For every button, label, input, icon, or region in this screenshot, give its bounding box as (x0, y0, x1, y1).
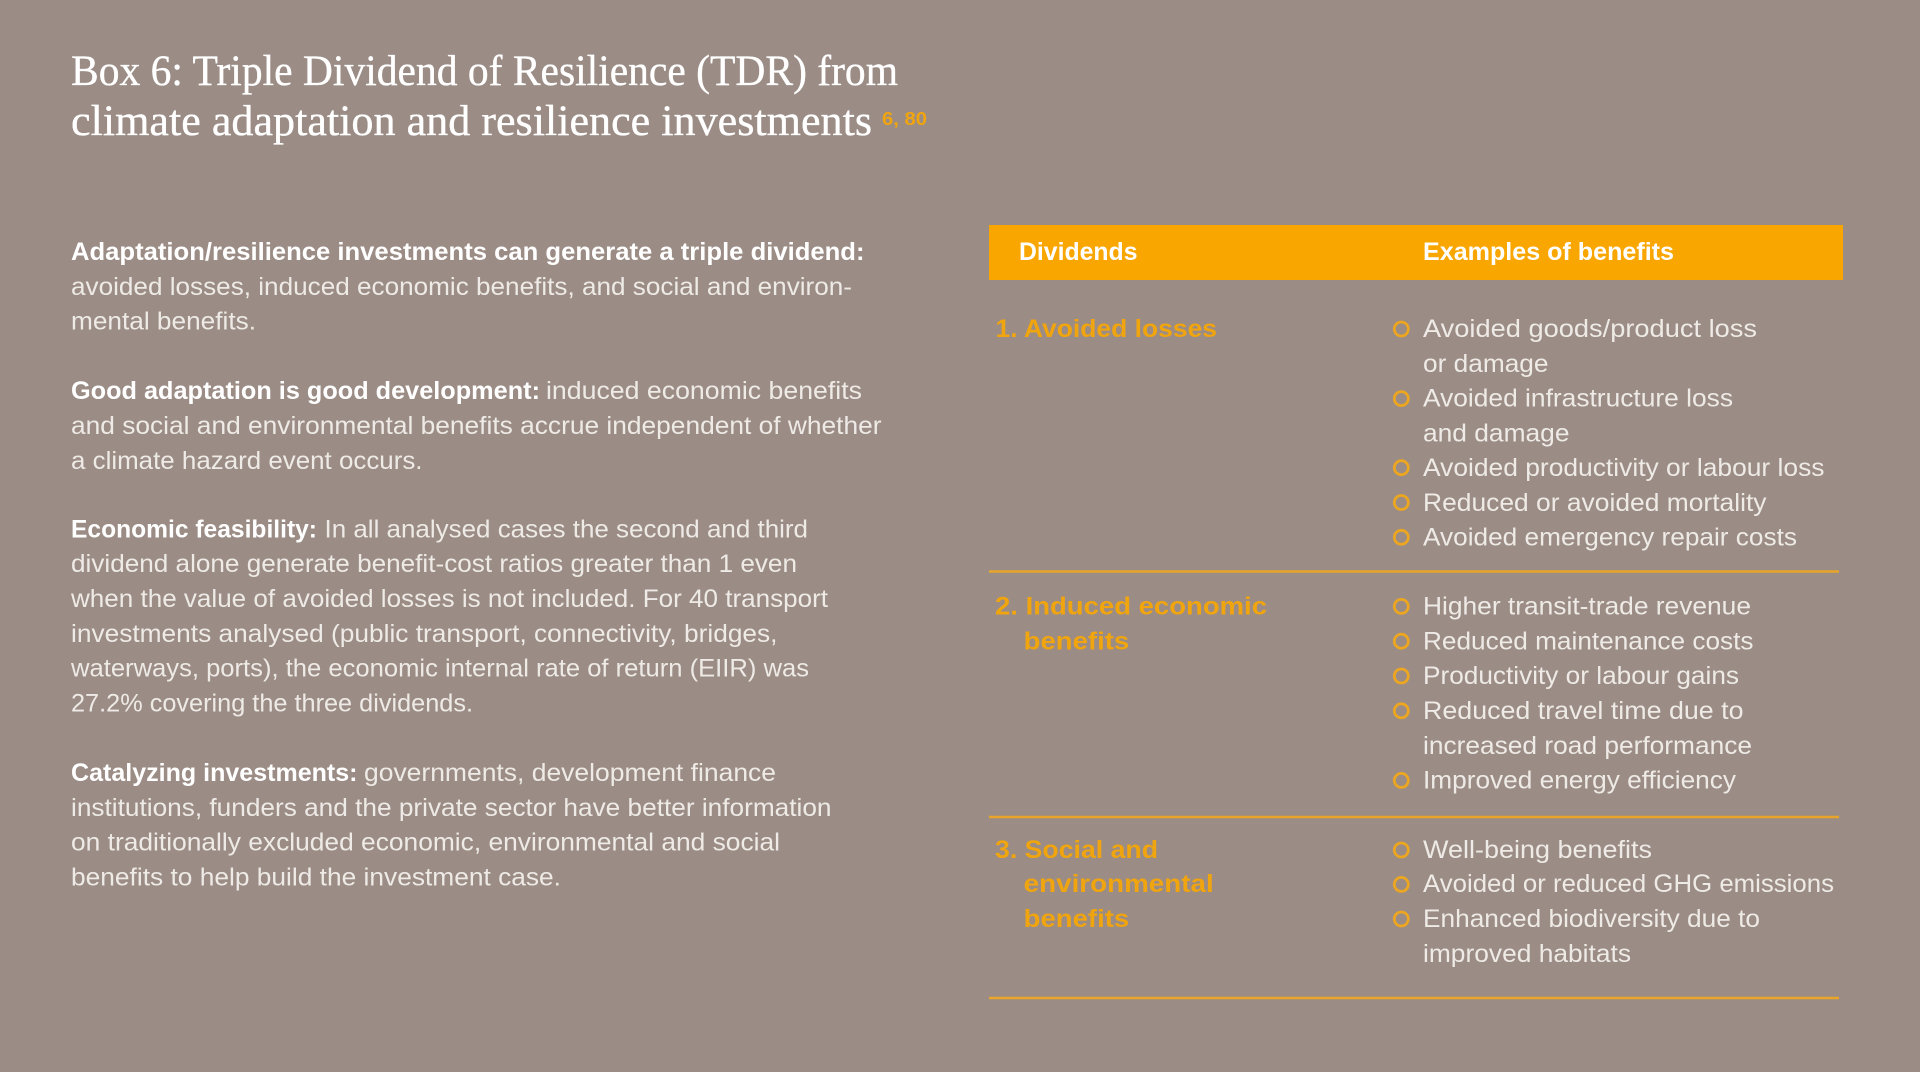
paragraph: good adaptation: and social and environmental benefits accrue independent of whether (71, 412, 881, 440)
paragraph: triple dividend: avoided losses, induced economic benefits, and social and environ- (71, 273, 852, 301)
title: Box 6: Triple Dividend of Resilience (TDR) from (71, 48, 898, 95)
row: social and environmental benefits: environmental (1024, 870, 1214, 898)
row: induced economic benefits: Higher transit-trade revenue (1423, 593, 1751, 621)
row: social and environmental benefits: benefits (1024, 905, 1129, 933)
row: induced economic benefits: Improved energy efficiency (1423, 767, 1737, 795)
row: avoided losses: or damage (1423, 350, 1548, 378)
row: social and environmental benefits: Well-being benefits (1423, 836, 1652, 864)
row: induced economic benefits: increased road performance (1423, 732, 1752, 760)
row: avoided losses: and damage (1423, 419, 1570, 447)
row: induced economic benefits: 2. Induced economic (995, 593, 1267, 621)
row: social and environmental benefits: Enhanced biodiversity due to (1423, 905, 1760, 933)
row: induced economic benefits: benefits (1024, 627, 1129, 655)
row: avoided losses: Avoided goods/product loss (1423, 315, 1757, 343)
row: avoided losses: Avoided infrastructure loss (1423, 385, 1733, 413)
paragraph: economic feasibility: investments analysed (public transport, connectivity, bridges, (71, 620, 778, 648)
row: induced economic benefits (995, 593, 1754, 795)
row: social and environmental benefits: Avoided or reduced GHG emissions (1423, 870, 1834, 898)
paragraph: economic feasibility: when the value of avoided losses is not included. For 40 transport (70, 585, 828, 613)
row: social and environmental benefits: improved habitats (1423, 940, 1631, 968)
title: 6, 80 (882, 109, 927, 129)
paragraph: economic feasibility (70, 515, 828, 717)
row: induced economic benefits: Reduced travel time due to (1423, 697, 1744, 725)
paragraph: good adaptation (71, 377, 881, 475)
paragraph: economic feasibility: In all analysed cases the second and third (324, 515, 808, 543)
paragraph: good adaptation: Good adaptation is good development: (71, 377, 540, 405)
paragraph: triple dividend (71, 238, 864, 336)
table header: Dividends (1019, 238, 1138, 266)
title: climate adaptation and resilience investments (71, 98, 872, 145)
paragraph: triple dividend: mental benefits. (71, 308, 256, 336)
paragraph: triple dividend: Adaptation/resilience investments can generate a triple dividend: (71, 238, 864, 266)
paragraph: catalyzing investments: governments, development finance (364, 759, 776, 787)
row: avoided losses (996, 315, 1824, 551)
panel: explanatory text (70, 238, 881, 891)
title (71, 48, 927, 145)
panel: dividends table (989, 225, 1843, 998)
paragraph: good adaptation: induced economic benefits (546, 377, 862, 405)
paragraph: catalyzing investments: on traditionally excluded economic, environmental and social (71, 829, 780, 857)
row: induced economic benefits: Reduced maintenance costs (1423, 627, 1754, 655)
paragraph: catalyzing investments (71, 759, 832, 891)
paragraph: economic feasibility: dividend alone generate benefit-cost ratios greater than 1 even (71, 550, 797, 578)
paragraph: economic feasibility: waterways, ports), the economic internal rate of return (EIIR) was (70, 655, 809, 683)
row: social and environmental benefits: 3. Social and (995, 836, 1158, 864)
table header: Examples of benefits (1423, 238, 1674, 266)
row: avoided losses: 1. Avoided losses (996, 315, 1217, 343)
row: avoided losses: Reduced or avoided mortality (1423, 489, 1767, 517)
paragraph: catalyzing investments: benefits to help build the investment case. (71, 863, 561, 891)
row: induced economic benefits: Productivity or labour gains (1423, 662, 1739, 690)
table header (989, 225, 1843, 280)
paragraph: catalyzing investments: institutions, funders and the private sector have better information (71, 794, 832, 822)
paragraph: catalyzing investments: Catalyzing investments: (71, 759, 358, 787)
row: avoided losses: Avoided emergency repair costs (1423, 523, 1797, 551)
paragraph: economic feasibility: 27.2% covering the three dividends. (71, 689, 473, 717)
row: avoided losses: Avoided productivity or labour loss (1423, 454, 1824, 482)
paragraph: good adaptation: a climate hazard event occurs. (71, 447, 422, 475)
row: social and environmental benefits (995, 836, 1834, 968)
paragraph: economic feasibility: Economic feasibility: (71, 515, 317, 543)
